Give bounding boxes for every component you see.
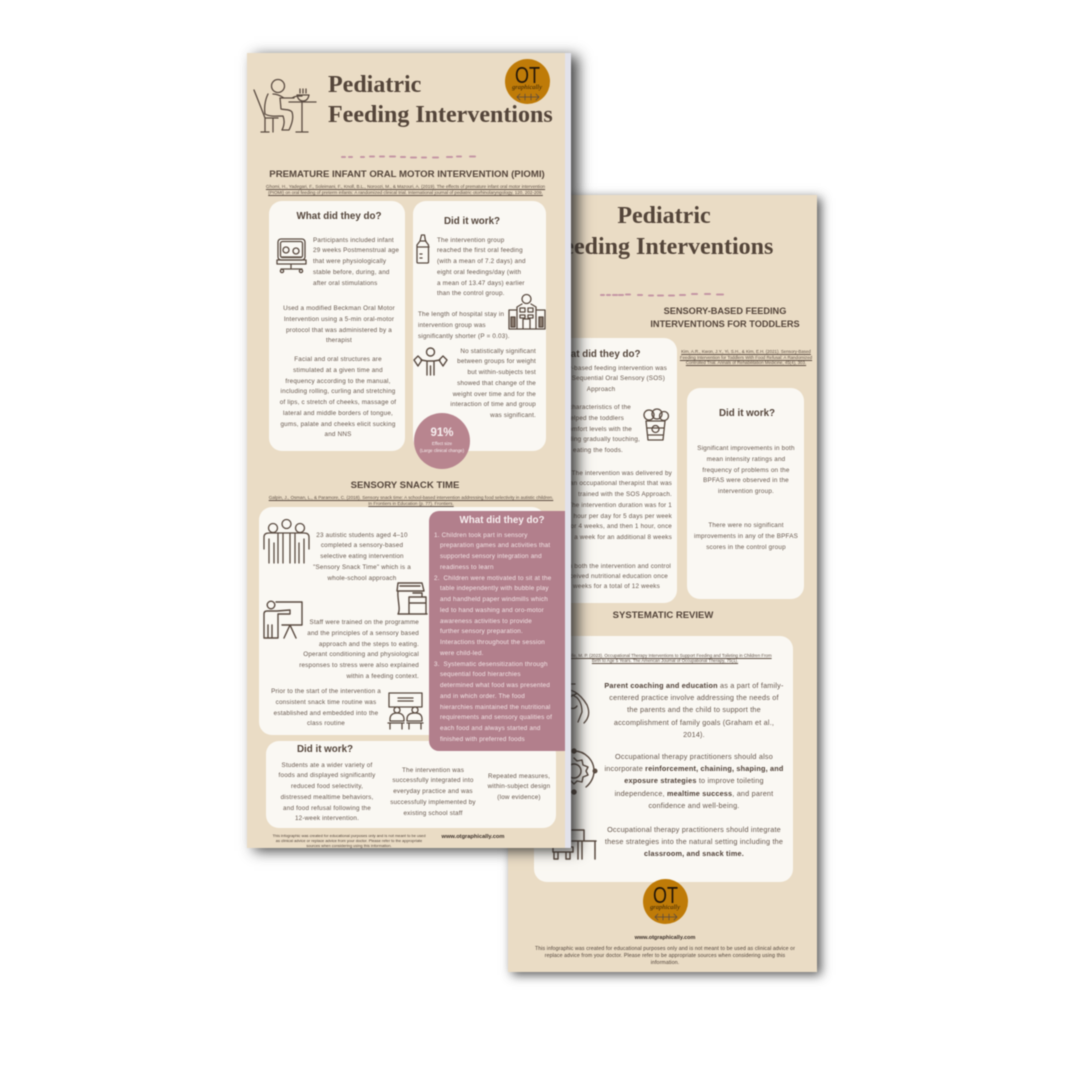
text: Beckman intervention: protocol that was administered by a <box>286 326 392 334</box>
text: facial and oral structures: gums, palate and cheeks elicit sucking <box>280 420 396 428</box>
panel: what did they do <box>269 201 405 451</box>
text: food selectivity results: and food refusal following the <box>283 804 371 812</box>
heading: sensory-based feeding interventions <box>650 306 800 329</box>
citation: PIOMI: (PIOMI) on oral feeding of preterm infants: A randomized clinical trial. International journal of pediatric otorhinolaryngology, 120, 202-209. <box>268 190 543 195</box>
text: delivery and duration: trained with the SOS Approach. <box>578 491 672 498</box>
text: nutrition education: In both the intervention and control <box>567 563 671 570</box>
list item 3: each food and always started and <box>440 725 541 732</box>
text: integration results: successfully integrated into <box>392 777 474 784</box>
text: occupational therapy strategies: independence, mealtime success, and parent <box>615 789 773 798</box>
text: parent coaching: centered practice involve addressing the needs of <box>609 693 779 702</box>
text: food selectivity results: distressed mealtime behaviors, <box>281 794 373 801</box>
list item 2: 2. Children were motivated to sit at the <box>434 574 551 582</box>
list item 1: preparation games and activities that <box>440 542 550 549</box>
text: approach: Approach <box>587 386 615 393</box>
list item 3 <box>434 660 552 746</box>
title: right sheet second line: Feeding Interventions <box>549 234 773 260</box>
text: natural setting <box>604 825 784 858</box>
heading: PIOMI: PREMATURE INFANT ORAL MOTOR INTERVENTION (PIOMI) <box>269 169 545 180</box>
text: parent coaching: accomplishment of family goals (Graham et al., <box>614 718 774 727</box>
text: autistic students: "Sensory Snack Time" which is a <box>313 564 411 571</box>
icon: group of three people <box>262 518 310 564</box>
text: nutrition education third line: for all weeks for a total of 12 weeks <box>554 583 660 590</box>
text: first oral feeding <box>436 236 526 298</box>
text: evidence level: (low evidence) <box>497 794 541 801</box>
heading: did it work: Did it work? <box>444 216 500 227</box>
text: natural setting: classroom, and snack time. <box>644 849 744 858</box>
citation: sensory-based feeding: Controlled Trial. Annals of Rehabilitation Medicine, 45(4), 303. <box>686 360 806 365</box>
list item 1: readiness to learn <box>440 564 494 571</box>
text: first oral feeding: eight oral feedings/day (with <box>437 269 521 276</box>
callout label: Effect size <box>432 441 452 446</box>
text: Beckman intervention: Used a modified Beckman Oral Motor <box>283 305 395 312</box>
text: facial and oral structures <box>279 356 396 438</box>
list item 2: table independently with bubble play <box>440 585 549 592</box>
text: first oral feeding: reached the first oral feeding <box>437 247 523 254</box>
text: hospital stay: intervention group was <box>418 322 486 329</box>
text: first oral feeding: The intervention group <box>437 236 504 244</box>
logo: right sheet <box>642 879 688 924</box>
disclaimer: right sheet: This infographic was created for educational purposes only and is not meant to be used as clinical advice or <box>535 946 795 952</box>
list item 1 <box>434 530 550 574</box>
list item 3: hierarchies maintained the nutritional <box>440 704 551 710</box>
heading: sensory-based feeding interventions: INTERVENTIONS FOR TODDLERS <box>650 319 800 329</box>
text: hospital stay: significantly shorter (P = 0.03). <box>418 332 510 340</box>
text: weight results: weight over time and for the <box>453 390 536 398</box>
text: natural setting: these strategies into the natural setting including the <box>605 837 783 846</box>
text: delivery and duration: a week for an additional 8 weeks <box>574 534 672 541</box>
icon: teacher at board <box>262 600 304 640</box>
text: evidence level: within-subject design <box>488 783 550 790</box>
text: significant improvements: mean intensity ratings and <box>707 456 785 463</box>
icon: person weighing options <box>412 346 448 376</box>
text: facial and oral structures: lateral and middle borders of tongue, <box>283 410 393 417</box>
citation: PIOMI: Ghomi, H., Yadegari, F., Soleimani, F., Knoll, B.L., Noroozi, M., & Mazouri, A. (2019). The effects of premature infant oral motor intervention <box>266 184 545 189</box>
text: staff training: approach and the steps to eating. <box>319 640 419 648</box>
panel: sensory snack description <box>259 507 545 735</box>
title: right sheet: Pediatric <box>617 203 711 229</box>
heading: systematic review: SYSTEMATIC REVIEW <box>613 610 713 621</box>
text: nutrition education second line: groups received nutritional education once <box>541 573 668 580</box>
panel: did it work <box>266 741 556 828</box>
text: facial and oral structures: of lips, c stretch of cheeks, massage of <box>280 399 396 406</box>
logo text: graphically: graphically <box>512 84 542 91</box>
decorative dashed divider <box>600 292 724 297</box>
text: autistic students <box>312 532 412 582</box>
text: no significant improvements: improvements in any of the BPFAS <box>694 533 798 540</box>
citation: systematic review: Birth to Age 5 Years. The American Journal of Occupational Therapy, 75(1). <box>592 658 738 663</box>
panel: right infographic sheet <box>508 195 817 972</box>
text: staff training: responses to stress were also explained <box>299 662 419 669</box>
text: Beckman intervention: therapist <box>326 337 352 344</box>
citation: sensory-based feeding <box>679 349 813 367</box>
list item 2: further sensory preparation. <box>440 628 523 635</box>
text: sensory characteristics: The characteristics of the <box>555 404 631 411</box>
website: left sheet: www.otgraphically.com <box>442 834 504 840</box>
text: significant improvements: BPFAS were observed in the <box>703 477 789 484</box>
text: weight results: No statistically significant <box>460 348 536 354</box>
icon: classroom <box>386 692 424 730</box>
text: participants: stable before, during, and <box>313 269 390 276</box>
text: delivery and duration <box>568 470 672 541</box>
text: delivery and duration: The intervention duration was for 1 <box>568 502 672 509</box>
list item 2: awareness activities to provide <box>440 618 532 624</box>
citation: PIOMI <box>265 184 546 197</box>
callout: effect size <box>414 413 470 469</box>
text: occupational therapy strategies: Occupational therapy practitioners should also <box>615 752 773 761</box>
logo: left sheet <box>504 59 550 104</box>
text: integration results <box>390 766 476 819</box>
panel: did it work <box>413 201 546 451</box>
title: left sheet second line: Feeding Interventions <box>328 102 553 128</box>
text: Beckman intervention <box>282 304 395 344</box>
text: approach name: the Sequential Oral Sensory (SOS) <box>560 375 665 382</box>
logo arrows <box>654 913 678 921</box>
text: no significant improvements: scores in the control group <box>706 544 786 550</box>
text: participants <box>312 236 400 286</box>
text: food selectivity results <box>279 760 375 825</box>
heading: what did they do: What did they do? <box>297 211 381 222</box>
text: occupational therapy strategies: incorporate reinforcement, chaining, shaping, and <box>604 764 784 773</box>
text: integration results: everyday practice and was <box>393 788 473 795</box>
logo arrows <box>516 93 540 101</box>
list item 3: sequential food hierarchies <box>440 671 521 678</box>
list item 3: finished with preferred foods <box>440 736 525 743</box>
text: parent coaching: the parents and the child to support the <box>627 705 761 714</box>
citation: sensory snack time: Galpin, J., Osman, L., & Paramore, C. (2018). Sensory snack time: A school-based intervention addressing food selectivity in autistic children. <box>269 495 553 500</box>
citation: systematic review: Boisselle, M. P. (2023). Occupational Therapy Interventions to Support Feeding and Toileting in Children From <box>558 653 772 658</box>
disclaimer: left sheet: This infographic was created for educational purposes only and is not meant to be used <box>272 833 426 838</box>
citation: sensory-based feeding: Feeding Intervention for Toddlers With Food Refusal: A Randomized <box>680 355 812 360</box>
text: autistic students: completed a sensory-based <box>321 542 403 549</box>
text: autistic students: 23 autistic students aged 4–10 <box>316 532 408 538</box>
text: snack routine: consistent snack time routine was <box>276 699 376 706</box>
text: delivery and duration: The intervention was delivered by <box>572 470 672 476</box>
text: staff training: Staff were trained on the programme <box>310 619 419 626</box>
icon: hands <box>570 682 590 724</box>
text: evidence level <box>488 772 550 804</box>
text: touching: feeding gradually touching, <box>559 436 640 443</box>
logo text: graphically: graphically <box>650 904 680 911</box>
text: facial and oral structures: Facial and oral structures are <box>294 356 382 363</box>
text: delivery and duration: hour per day for 5 days per week <box>574 512 672 520</box>
text: significant improvements: frequency of problems on the <box>702 466 790 474</box>
text: delivery and duration: for 4 weeks, and then 1 hour, once <box>569 523 672 530</box>
disclaimer: left sheet: as clinical advice or replace advice from your doctor. Please refer to the appropriate <box>276 838 422 843</box>
text: autistic students: selective eating intervention <box>320 553 404 560</box>
heading: did it work: Did it work? <box>719 408 775 419</box>
text: participants: after oral stimulations <box>313 280 377 286</box>
heading: sensory-based feeding interventions: SENSORY-BASED FEEDING <box>664 306 786 316</box>
citation: sensory snack time: In Frontiers in Education (p. 77). Frontiers. <box>368 501 454 506</box>
text: integration results: The intervention was <box>402 766 464 774</box>
list item 2 <box>434 574 551 660</box>
text: facial and oral structures: stimulated at a given time and <box>293 367 383 374</box>
text: staff training <box>298 618 420 680</box>
list item 3: requirements and sensory qualities of <box>440 714 552 721</box>
text: natural setting: Occupational therapy practitioners should integrate <box>607 825 781 834</box>
website: right sheet: www.otgraphically.com <box>635 935 695 941</box>
text: snack routine: class routine <box>307 720 345 727</box>
text: weight results: was significant. <box>490 412 536 419</box>
text: parent coaching: Parent coaching and education as a part of family- <box>604 681 784 690</box>
text: integration results: successfully implemented by <box>390 799 476 806</box>
list item 1: supported sensory integration and <box>440 553 542 560</box>
text: occupational therapy strategies <box>604 752 784 810</box>
disclaimer: left sheet: sources when considering using this information. <box>306 843 392 848</box>
text: food selectivity results: foods and displayed significantly <box>279 772 375 779</box>
list item 3: determined what food was presented <box>440 682 550 689</box>
text: snack routine <box>270 688 382 727</box>
text: Beckman intervention: Intervention using a 5-min oral-motor <box>284 316 394 323</box>
text: snack routine: established and embedded into the <box>274 710 378 716</box>
callout label: (Large clinical change) <box>420 448 464 453</box>
text: parent coaching <box>604 681 784 739</box>
text: staff training: within a feeding context. <box>346 673 419 680</box>
text: no significant improvements <box>694 522 798 552</box>
icon: incubator <box>276 238 308 274</box>
text: first oral feeding: (with a mean of 7.2 days) and <box>437 258 526 265</box>
text: staff training: and the principles of a sensory based <box>307 630 419 637</box>
heading: did it work: Did it work? <box>297 744 353 755</box>
list item 2: Interactions throughout the session <box>440 639 545 646</box>
text: participants: 29 weeks Postmenstrual age <box>313 247 399 254</box>
text: facial and oral structures: and NNS <box>325 431 351 438</box>
icon: gear with cycle arrows <box>570 748 598 796</box>
icon: hospital <box>508 293 546 330</box>
text: first oral feeding: than the control group. <box>437 290 505 297</box>
text: facial and oral structures: frequency according to the manual, <box>285 378 391 384</box>
text: weight results <box>450 348 536 420</box>
text: delivery and duration: an occupational therapist that was <box>570 480 672 487</box>
icon: cup of food <box>642 408 670 442</box>
icon: desk and chair <box>552 828 598 860</box>
text: autistic students: whole-school approach <box>328 574 396 582</box>
disclaimer: right sheet: information. <box>651 960 679 966</box>
text: intervention description: Sensory-based feeding intervention was <box>547 365 667 372</box>
heading: sensory snack time: SENSORY SNACK TIME <box>351 480 459 491</box>
callout value: 91% <box>430 427 454 439</box>
disclaimer: right sheet: replace advice from your doctor. Please refer to be appropriate sources when considering using this <box>545 953 785 959</box>
text: weight results: but within-subjects test <box>468 369 536 376</box>
text: snack routine: Prior to the start of the intervention a <box>271 688 381 695</box>
icon: baby bottle <box>416 234 430 264</box>
panel: did it work <box>687 388 804 599</box>
callout label <box>420 441 464 454</box>
panel: what did they do <box>534 338 677 603</box>
text: weight results: interaction of time and group <box>450 401 536 408</box>
text: significant improvements: Significant improvements in both <box>697 445 795 452</box>
text: parent coaching: 2014). <box>683 730 705 739</box>
text: food selectivity results: Students ate a wider variety of <box>282 762 372 768</box>
list item 1: 1. Children took part in sensory <box>434 532 528 538</box>
text: food selectivity results: reduced food selectivity, <box>291 783 363 790</box>
text: participants: Participants included infant <box>313 236 394 244</box>
heading: what did they do: What did they do? <box>460 515 544 526</box>
text: comfort levels: build comfort levels with the <box>549 426 632 432</box>
icon: person eating at table <box>252 78 318 134</box>
list item 3: 3. Systematic desensitization through <box>434 660 548 668</box>
text: eating: and eating the foods. <box>560 447 623 454</box>
citation: sensory snack time <box>268 495 554 508</box>
list item 2: were child-led. <box>440 650 484 657</box>
text: helped toddlers: foods helped the toddlers <box>548 415 624 422</box>
text: occupational therapy strategies: confidence and well-being. <box>648 801 740 810</box>
text: significant improvements: intervention group. <box>718 488 774 495</box>
text: weight results: between groups for weight <box>457 358 536 365</box>
text: weight results: showed that change of the <box>457 380 536 387</box>
citation: sensory-based feeding: Kim, A.R., Kwon, J.Y., Yi, S.H., & Kim, E.H. (2021). Sensory-Based <box>681 349 811 354</box>
panel: what did they do (mauve) <box>429 511 565 751</box>
citation: systematic review <box>558 653 772 665</box>
logo text: OT: OT <box>515 62 539 88</box>
text: evidence level: Repeated measures, <box>488 772 550 780</box>
text: no significant improvements: There were no significant <box>708 522 784 529</box>
text: hospital stay <box>418 310 510 340</box>
disclaimer: left sheet <box>272 833 426 848</box>
text: participants: that were physiologically <box>313 258 386 265</box>
panel: systematic review <box>534 636 793 882</box>
panel: left infographic sheet <box>247 53 571 848</box>
text: occupational therapy strategies: exposure strategies to improve toileting <box>624 776 764 785</box>
text: hospital stay: The length of hospital stay in <box>418 311 504 318</box>
text: significant improvements <box>697 444 795 496</box>
disclaimer: right sheet <box>534 945 796 966</box>
text: integration results: existing school staff <box>403 810 463 816</box>
list item 3: and in which order. The food <box>440 693 525 700</box>
text: facial and oral structures: including rolling, curling and stretching <box>281 388 395 395</box>
text: first oral feeding: a mean of 13.47 days) earlier <box>437 280 525 286</box>
list item 2: led to hand washing and oro-motor <box>440 607 544 614</box>
decorative dashed divider <box>340 155 476 159</box>
text: food selectivity results: 12-week intervention. <box>295 815 359 822</box>
list item 2: and handheld paper windmills which <box>440 596 548 603</box>
icon: food trays <box>396 582 428 616</box>
title: left sheet: Pediatric <box>328 72 421 98</box>
text: staff training: Operant conditioning and physiological <box>303 651 419 658</box>
heading: what did they do: What did they do? <box>556 349 640 360</box>
logo text: OT: OT <box>653 882 677 908</box>
